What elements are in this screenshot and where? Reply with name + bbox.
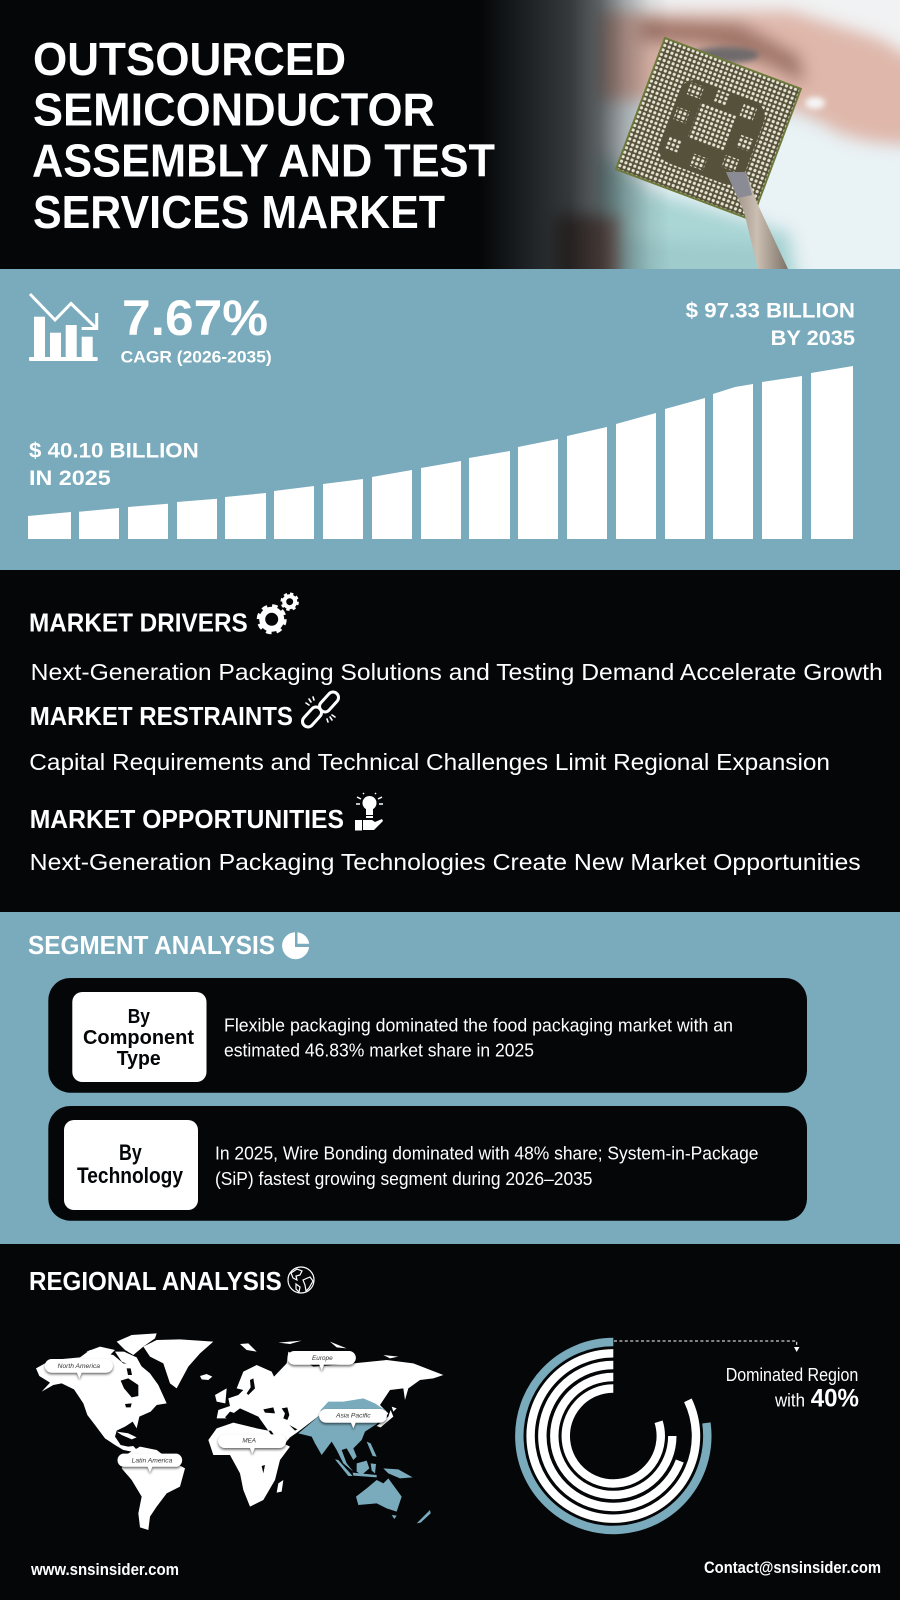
- dominated region callout: 40%: [811, 1385, 859, 1413]
- label box: [72, 992, 206, 1082]
- card: by technology: [48, 1106, 807, 1221]
- description: [224, 1015, 733, 1061]
- title: SERVICES MARKET: [33, 186, 445, 238]
- heading: segment analysis: SEGMENT ANALYSIS: [28, 932, 275, 960]
- radial bar chart: [519, 1342, 707, 1530]
- description: estimated 46.83% market share in 2025: [224, 1040, 534, 1061]
- title: [32, 33, 495, 238]
- dominated region callout: Dominated Region: [726, 1365, 858, 1385]
- header panel: [33, 0, 900, 269]
- drivers text: Next-Generation Packaging Solutions and Testing Demand Accelerate Growth: [31, 659, 883, 685]
- label: MEA: [218, 1434, 286, 1454]
- icon: broken chain: [300, 690, 341, 729]
- chip: [615, 37, 802, 221]
- label: North America: [45, 1359, 113, 1378]
- icon: idea in hand: [355, 793, 383, 830]
- label box: [64, 1120, 198, 1210]
- label: Europe: Europe: [312, 1355, 333, 1362]
- description: In 2025, Wire Bonding dominated with 48% share; System-in-Package: [215, 1142, 758, 1163]
- website: www.snsinsider.com: [30, 1561, 179, 1579]
- dominated region callout: with: [774, 1391, 805, 1411]
- panel: regional analysis: [0, 1244, 900, 1600]
- heading: regional analysis: REGIONAL ANALYSIS: [29, 1266, 282, 1296]
- label box: By: [128, 1006, 151, 1028]
- title: OUTSOURCED: [33, 33, 346, 85]
- panel: market dynamics: [0, 570, 900, 912]
- opportunities text: Next-Generation Packaging Technologies Create New Market Opportunities: [30, 849, 861, 875]
- label: Latin America: Latin America: [132, 1458, 173, 1465]
- panel: market size: [0, 269, 900, 570]
- CAGR value: 7.67%: [122, 290, 268, 346]
- 2035 value: $ 97.33 BILLION: [686, 298, 855, 322]
- heading: market restraints: MARKET RESTRAINTS: [30, 701, 293, 731]
- label box: Component: [83, 1027, 194, 1049]
- landmasses: [36, 1333, 443, 1530]
- label: North America: North America: [58, 1363, 100, 1370]
- dominated region callout: [726, 1365, 859, 1413]
- label: Latin America: [117, 1454, 182, 1472]
- label: Asia Pacific: Asia Pacific: [335, 1413, 371, 1420]
- 2025 value: $ 40.10 BILLION: [29, 438, 199, 462]
- tweezers: [726, 172, 788, 269]
- 2025 value: IN 2025: [29, 466, 111, 490]
- CAGR label: CAGR (2026-2035): [121, 347, 272, 366]
- title: SEMICONDUCTOR: [33, 84, 435, 136]
- panel: segment analysis: [0, 912, 900, 1244]
- 2035 value: [686, 298, 855, 350]
- title: ASSEMBLY AND TEST: [32, 134, 495, 186]
- contact email: Contact@snsinsider.com: [704, 1559, 881, 1577]
- card: by component type: [48, 978, 807, 1093]
- description: (SiP) fastest growing segment during 2026–2035: [215, 1168, 592, 1189]
- bar chart: market growth: [28, 366, 853, 539]
- dashed leader arrow: [614, 1341, 800, 1352]
- photo: technician holding a chip: [494, 0, 900, 269]
- label: Europe: [287, 1351, 356, 1370]
- icon: chart with falling arrow: [29, 294, 98, 361]
- label: Asia Pacific: [319, 1409, 387, 1428]
- heading: market drivers: MARKET DRIVERS: [29, 608, 248, 638]
- label box: Technology: [77, 1163, 184, 1188]
- label box: Type: [117, 1048, 161, 1070]
- 2035 value: BY 2035: [771, 326, 855, 350]
- icon: gears: [258, 594, 298, 633]
- world map: [36, 1333, 443, 1530]
- heading: market opportunities: MARKET OPPORTUNITIES: [30, 804, 344, 834]
- description: [215, 1142, 758, 1189]
- icon: pie chart: [282, 932, 309, 959]
- seas: [121, 1368, 297, 1473]
- description: Flexible packaging dominated the food packaging market with an: [224, 1015, 733, 1036]
- 2025 value: [29, 438, 199, 490]
- Asia Pacific highlight: [298, 1398, 431, 1523]
- label box: By: [119, 1140, 142, 1165]
- icon: globe: [288, 1267, 314, 1293]
- restraints text: Capital Requirements and Technical Challenges Limit Regional Expansion: [29, 749, 830, 775]
- label: MEA: MEA: [242, 1438, 257, 1445]
